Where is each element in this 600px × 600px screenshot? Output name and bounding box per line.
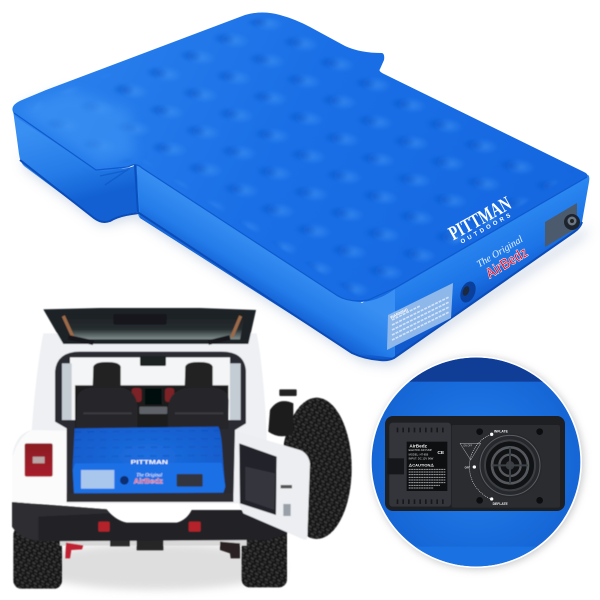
left head area highlight: [20, 90, 135, 165]
dial markings: OFF: [465, 465, 470, 469]
jeep photo: [12, 308, 352, 590]
cargo mattress label: [81, 470, 114, 489]
edge seam: [14, 113, 587, 301]
mattress side: left section: [13, 108, 139, 222]
spare tire: [268, 389, 352, 539]
seats: [76, 362, 229, 428]
built-in pump panel: [545, 203, 580, 247]
pump close-up callout: [370, 356, 583, 570]
pump spec label: CE: [437, 450, 445, 456]
pump spec label: AirBedz: [409, 443, 428, 448]
body: [13, 333, 267, 503]
logo: The Original AirBedz: AirBedz: [483, 244, 531, 282]
mattress bottom edge: [20, 160, 582, 360]
cab dashboard: [75, 385, 228, 429]
dial markings: ON OFF: [463, 446, 473, 448]
dial markings: DEFLATE: [493, 502, 509, 506]
ground shadow: [30, 543, 283, 590]
cargo mattress brand: The Original: [136, 474, 163, 479]
cargo sill: [67, 493, 233, 502]
pump spec label: [407, 442, 447, 491]
callout shadow: [371, 357, 583, 569]
cargo mattress valve: [120, 476, 129, 485]
pump spec label: ELECTRIC AIR PUMP: [409, 449, 432, 452]
jeep vehicle: [12, 308, 352, 589]
warning label: [387, 283, 453, 350]
fan dial: [478, 433, 542, 497]
logo: The Original AirBedz: The Original: [475, 234, 525, 270]
tufted dimples: [30, 18, 575, 296]
pump spec label: MODEL: HT-856: [409, 452, 429, 456]
mattress drop shadow: [24, 150, 590, 366]
cargo mattress brand: AirBedz: [134, 477, 163, 486]
pump housing: [385, 416, 565, 511]
dial markings: INFLATE: [494, 429, 509, 433]
air valve: [457, 279, 479, 305]
open tailgate door: [237, 432, 310, 540]
rear opening: [55, 352, 246, 502]
logo: Pittman Outdoors: PITTMAN: [445, 192, 516, 245]
screws: [476, 428, 543, 504]
mattress in cargo area: [73, 427, 225, 493]
mattress top surface: [12, 12, 588, 302]
air mattress: [12, 12, 589, 360]
callout white ring: [370, 356, 582, 568]
cargo mattress logo: PITTMAN: [131, 460, 168, 466]
pump spec label: ⚠CAUTION⚠: [409, 462, 434, 467]
pump spec label: INPUT: DC 12V 96W: [409, 456, 434, 460]
rear wheels: [13, 527, 287, 589]
logo: Pittman Outdoors: [445, 192, 517, 248]
rear bumper: [12, 502, 287, 541]
warning label: WARNING: [389, 307, 409, 320]
raised rear hatch: [43, 308, 256, 344]
callout photo: [370, 357, 583, 570]
cargo mattress pump: [177, 474, 203, 487]
dial markings: [460, 429, 509, 506]
tail light: [25, 443, 53, 477]
axle and hitch: [60, 538, 247, 558]
logo: The Original AirBedz: [475, 234, 534, 284]
logo: Pittman Outdoors: OUTDOORS: [460, 213, 512, 245]
mattress side: front section: [137, 165, 589, 360]
